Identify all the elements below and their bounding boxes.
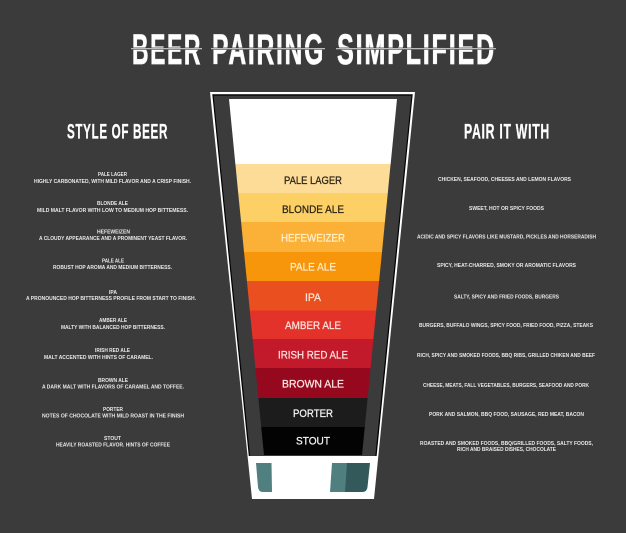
beer layer: amber ale: AMBER ALE <box>285 320 341 332</box>
foam <box>229 99 397 164</box>
style: pale lager: PALE LAGER <box>98 172 128 178</box>
beer layer: ipa <box>247 281 379 310</box>
pairing: stout: ROASTED AND SMOKED FOODS, BBQ/GRILLED FOODS, SALTY FOODS, <box>420 441 593 447</box>
beer layer: hefeweizer <box>241 222 385 252</box>
beer layer: stout: STOUT <box>296 436 330 448</box>
style: pale ale: ROBUST HOP AROMA AND MEDIUM BITTERNESS. <box>53 265 172 271</box>
glass illustration <box>210 92 415 499</box>
style: stout <box>56 436 170 448</box>
title: SIMPLIFIED <box>337 26 496 74</box>
style: blonde ale <box>37 201 188 214</box>
style: amber ale: AMBER ALE <box>99 318 127 324</box>
glass reflection: left <box>256 463 272 492</box>
style: pale lager: HIGHLY CARBONATED, WITH MILD FLAVOR AND A CRISP FINISH. <box>34 179 191 185</box>
beer layer: ipa: IPA <box>305 292 322 304</box>
beer layer: irish red ale <box>253 339 373 368</box>
style: brown ale: A DARK MALT WITH FLAVORS OF CARAMEL AND TOFFEE. <box>42 384 184 390</box>
style: porter: PORTER <box>103 407 124 413</box>
title: PAIRING <box>212 26 325 74</box>
beer layer: pale ale <box>244 252 382 281</box>
style: ipa <box>26 290 196 302</box>
glass outline <box>210 92 415 499</box>
beer layer: irish red ale: IRISH RED ALE <box>278 350 348 362</box>
style: ipa: A PRONOUNCED HOP BITTERNESS PROFILE FROM START TO FINISH. <box>26 296 196 302</box>
pairing: stout <box>420 441 593 453</box>
style: irish red ale <box>44 348 153 361</box>
style: irish red ale: MALT ACCENTED WITH HINTS OF CARAMEL. <box>44 355 153 361</box>
beer layer: brown ale <box>255 368 371 398</box>
style: pale ale <box>53 258 172 271</box>
style: stout: HEAVILY ROASTED FLAVOR. HINTS OF COFFEE <box>56 442 170 448</box>
style: pale lager <box>34 172 191 185</box>
beer layer: pale lager: PALE LAGER <box>284 175 342 187</box>
glass reflection: right <box>330 463 370 492</box>
style: hefeweizen <box>39 230 187 242</box>
beer layer: blonde ale <box>238 193 388 222</box>
style: ipa: IPA <box>109 290 118 296</box>
pairing: stout: RICH AND BRAISED DISHES, CHOCOLATE <box>457 447 556 453</box>
style: amber ale: MALTY WITH BALANCED HOP BITTERNESS. <box>61 325 165 331</box>
title: BEER <box>132 26 202 74</box>
pairing: porter: PORK AND SALMON, BBQ FOOD, SAUSAGE, RED MEAT, BACON <box>429 412 584 418</box>
pairing: blonde ale: SWEET, HOT OR SPICY FOODS <box>469 206 544 212</box>
pairing: irish red ale: RICH, SPICY AND SMOKED FOODS, BBQ RIBS, GRILLED CHIKEN AND BEEF <box>417 353 595 359</box>
heading: pair it with: PAIR IT WITH <box>464 120 550 144</box>
beer layer: brown ale: BROWN ALE <box>282 378 344 390</box>
style: blonde ale: BLONDE ALE <box>97 201 128 207</box>
beer layer: blonde ale: BLONDE ALE <box>282 204 344 216</box>
style: pale ale: PALE ALE <box>102 258 124 264</box>
style: porter: NOTES OF CHOCOLATE WITH MILD ROAST IN THE FINISH <box>42 414 184 420</box>
style: blonde ale: MILD MALT FLAVOR WITH LOW TO MEDIUM HOP BITTEMESS. <box>37 208 188 214</box>
beer layer: porter: PORTER <box>293 408 333 420</box>
pairing: amber ale: BURGERS, BUFFALO WINGS, SPICY FOOD, FRIED FOOD, PIZZA, STEAKS <box>419 323 593 329</box>
pairing: pale ale: SPICY, HEAT-CHARRED, SMOKY OR AROMATIC FLAVORS <box>437 263 576 269</box>
beer layer: stout <box>261 427 365 455</box>
style: stout: STOUT <box>104 436 121 442</box>
pairing: hefeweizen: ACIDIC AND SPICY FLAVORS LIKE MUSTARD, PICKLES AND HORSERADISH <box>417 234 596 240</box>
beer layer: pale ale: PALE ALE <box>290 262 336 274</box>
panel: food pairings <box>417 177 596 453</box>
beer layer: hefeweizer: HEFEWEIZER <box>281 232 345 244</box>
beer layer: pale lager <box>235 164 391 193</box>
style: porter <box>42 407 184 420</box>
style: irish red ale: IRISH RED ALE <box>95 348 130 354</box>
pairing: ipa: SALTY, SPICY AND FRIED FOODS, BURGERS <box>454 294 559 300</box>
style: hefeweizen: A CLOUDY APPEARANCE AND A PROMINENT YEAST FLAVOR. <box>39 236 187 242</box>
heading: style of beer: STYLE OF BEER <box>67 120 168 144</box>
pairing: brown ale: CHEESE, MEATS, FALL VEGETABLES, BURGERS, SEAFOOD AND PORK <box>423 383 590 389</box>
pairing: pale lager: CHICKEN, SEAFOOD, CHEESES AND LEMON FLAVORS <box>438 177 571 183</box>
style: amber ale <box>61 318 165 331</box>
title <box>130 26 497 74</box>
style: brown ale <box>42 378 184 390</box>
panel: beer style descriptions <box>26 172 196 448</box>
style: brown ale: BROWN ALE <box>98 378 128 384</box>
beer layer: porter <box>258 398 368 427</box>
beer layer: amber ale <box>250 310 376 339</box>
style: hefeweizen: HEFEWEIZEN <box>97 230 130 236</box>
